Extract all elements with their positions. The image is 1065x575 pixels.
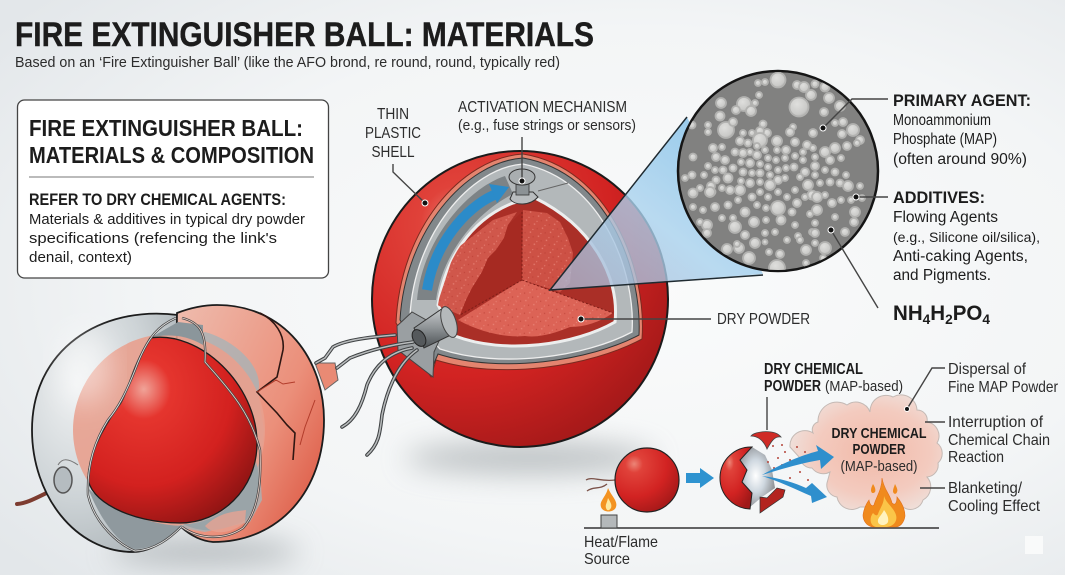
label: additives: (e.g., Silicone oil/silica), [893, 229, 1040, 245]
label: dry powder: DRY POWDER [717, 311, 810, 328]
heat source label [584, 534, 658, 568]
salmon outer shell half [177, 305, 324, 542]
label: blanketing: Cooling Effect [948, 498, 1041, 515]
end cap disc [54, 467, 72, 493]
chemical formula: H [930, 302, 945, 325]
shell torn edges [88, 318, 181, 551]
title: FIRE EXTINGUISHER BALL: MATERIALS [15, 16, 594, 54]
right powder wall [522, 210, 573, 292]
label: activation mechanism: ACTIVATION MECHANISM [458, 99, 627, 116]
fuse wiggles [586, 479, 615, 491]
wires from ball [315, 335, 417, 455]
label: activation mechanism: (e.g., fuse strings or sensors) [458, 117, 636, 134]
sequence: how the ball activates [584, 361, 1059, 568]
subtitle: Based on an ‘Fire Extinguisher Ball’ (like the AFO brond, re round, round, typically red) [15, 55, 560, 71]
fuse cord [17, 487, 60, 504]
box body text: denail, context) [29, 249, 132, 266]
chemical formula: 4 [923, 311, 930, 327]
candle flame [601, 488, 617, 528]
red outer sphere [372, 151, 668, 447]
leader: activation [519, 137, 525, 184]
activation mechanism knob [509, 169, 568, 204]
powder floor [458, 280, 613, 336]
box heading: FIRE EXTINGUISHER BALL: [29, 115, 303, 141]
ground shadows [110, 442, 655, 566]
panel: composition info box [18, 100, 328, 278]
heat source label: Heat/Flame [584, 534, 658, 551]
cloud label: DRY CHEMICAL [832, 425, 926, 442]
box body text [29, 211, 305, 266]
box heading: MATERIALS & COMPOSITION [29, 142, 314, 168]
blue flow arrow [427, 184, 509, 290]
dark centre wall [460, 226, 508, 314]
inner salmon sphere [73, 334, 265, 526]
label: additives: Anti-caking Agents, [893, 248, 1028, 265]
chemical formula: NH [893, 302, 923, 325]
illustration: opened ball on left [17, 305, 324, 552]
broken ball [720, 447, 785, 513]
microscope view of MAP powder [678, 71, 878, 276]
label: primary agent [893, 91, 1031, 168]
powder label: (MAP-based) [825, 379, 903, 395]
powder label [764, 361, 903, 395]
leaders: effects [904, 368, 945, 488]
cloud label [832, 425, 926, 475]
powder label: POWDER [764, 378, 821, 395]
intact ball [615, 448, 679, 512]
label: additives: Flowing Agents [893, 209, 998, 226]
box heading [29, 115, 314, 168]
label: thin plastic shell [365, 106, 421, 161]
red core sphere [88, 337, 257, 523]
powder particles [682, 72, 865, 276]
powder specks [767, 444, 809, 481]
shell opening rim [396, 154, 642, 377]
clear outer shell half [32, 314, 181, 552]
fire [863, 478, 905, 527]
chemical formula: PO [953, 302, 982, 325]
label: additives: and Pigments. [893, 267, 991, 284]
chemical formula: 4 [982, 311, 990, 327]
leader lines: microscope labels [820, 99, 888, 308]
label: dispersal: Dispersal of [948, 361, 1027, 378]
box body text: Materials & additives in typical dry powder [29, 211, 305, 228]
label: thin plastic shell: THIN [377, 106, 409, 123]
label: chain interruption: Interruption of [948, 414, 1044, 431]
watermark square [1025, 536, 1043, 554]
crack in salmon shell [257, 313, 295, 460]
ground line [584, 527, 939, 529]
leader: dry powder [578, 316, 711, 322]
powder label: DRY CHEMICAL [764, 361, 863, 378]
label: thin plastic shell: PLASTIC [365, 125, 421, 142]
wire connector housing [397, 305, 461, 377]
salmon wire tag [315, 363, 338, 390]
label: primary agent: (often around 90%) [893, 151, 1027, 168]
magnifier cone [550, 117, 763, 290]
heat source label: Source [584, 551, 630, 568]
box body text: specifications (refencing the link's [29, 230, 277, 247]
label: primary agent: Monoammonium [893, 112, 991, 129]
label: thin plastic shell: SHELL [372, 144, 415, 161]
shell interior shadow wedges [150, 322, 203, 345]
label: additives: ADDITIVES: [893, 188, 985, 207]
label: chain interruption: Reaction [948, 449, 1004, 466]
cloud label: (MAP-based) [840, 458, 918, 475]
powder cloud [790, 395, 942, 509]
label: dispersal [948, 361, 1059, 396]
leader: shell [393, 164, 428, 206]
label: activation mechanism [458, 99, 636, 134]
leader: fragment [766, 397, 768, 430]
left powder wall [437, 212, 517, 315]
clear shell highlight [59, 332, 111, 404]
label: primary agent: PRIMARY AGENT: [893, 91, 1031, 110]
flying shell fragment [751, 432, 781, 449]
cloud label: POWDER [852, 441, 906, 458]
box subheading: REFER TO DRY CHEMICAL AGENTS: [29, 190, 286, 209]
arrow [686, 468, 714, 488]
translucent grey shell interior [170, 332, 264, 532]
label: chain interruption [948, 414, 1050, 466]
label: blanketing: Blanketing/ [948, 480, 1023, 497]
label: additives [893, 188, 1040, 284]
chemical formula: 2 [945, 311, 953, 327]
illustration: main cutaway ball [372, 151, 668, 447]
blue burst arrows [762, 445, 834, 503]
label: chain interruption: Chemical Chain [948, 432, 1050, 449]
powder cavity [437, 198, 616, 346]
grey shell wall [400, 158, 639, 368]
label: blanketing [948, 480, 1041, 515]
label: primary agent: Phosphate (MAP) [893, 131, 997, 148]
